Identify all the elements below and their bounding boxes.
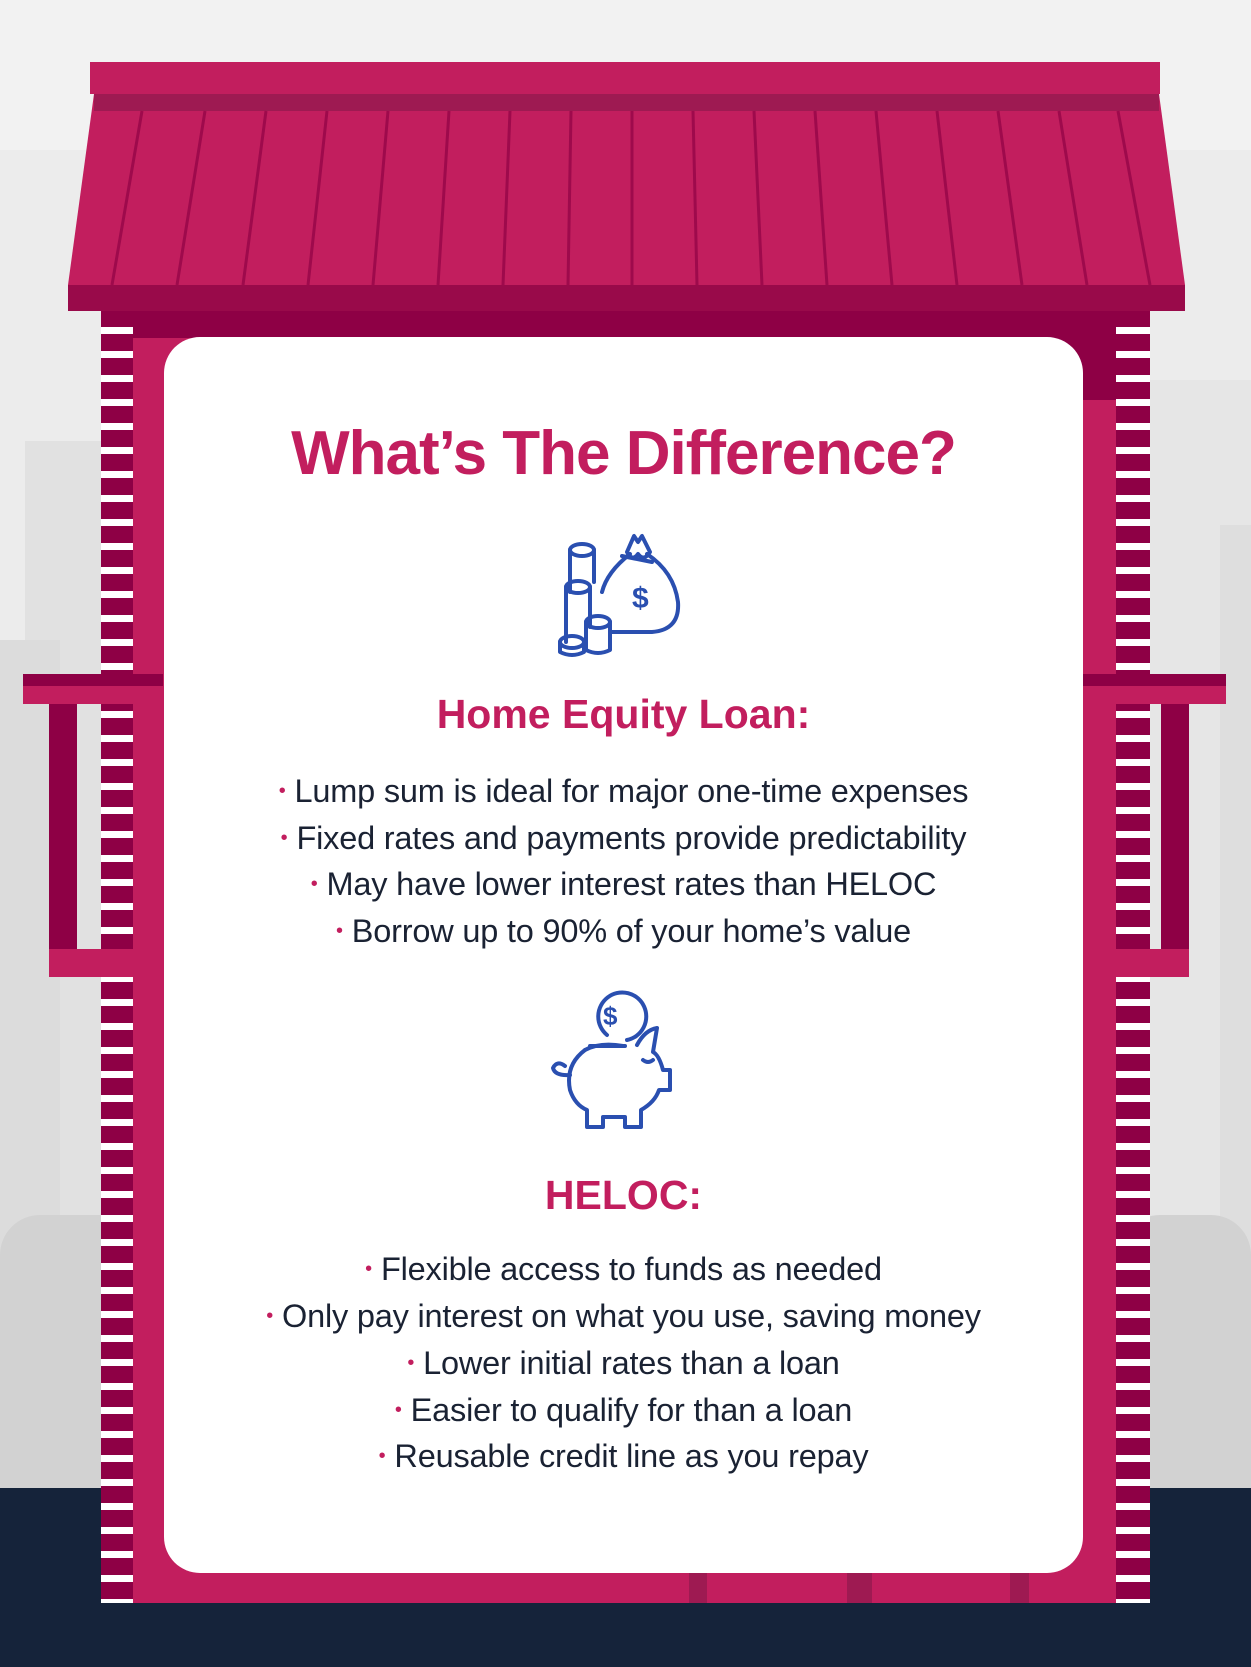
- right balcony: [1083, 674, 1226, 977]
- list: home equity loan: [279, 773, 968, 949]
- icon: piggy bank: [551, 990, 672, 1129]
- list: HELOC: • Lower initial rates than a loan: [407, 1345, 840, 1381]
- left balcony: [23, 674, 163, 977]
- list: home equity loan: • Borrow up to 90% of your home’s value: [336, 913, 911, 949]
- list: home equity loan: • Fixed rates and payments provide predictability: [281, 820, 966, 856]
- icon: money bag: [558, 534, 680, 657]
- white card: [164, 337, 1083, 1573]
- left ladder strip: [101, 310, 133, 1603]
- icon: piggy bank: $: [603, 1001, 618, 1031]
- heading: home equity loan: Home Equity Loan:: [437, 691, 810, 737]
- title: What’s The Difference?: [291, 419, 956, 488]
- list: HELOC: • Flexible access to funds as needed: [365, 1251, 882, 1287]
- icon: money bag: $: [632, 582, 649, 615]
- list: home equity loan: • May have lower interest rates than HELOC: [311, 866, 936, 902]
- ground: [0, 1488, 1251, 1667]
- beam: [133, 310, 1116, 338]
- list: HELOC: • Easier to qualify for than a loan: [395, 1392, 852, 1428]
- wall body: [133, 310, 1116, 1603]
- list: HELOC: • Only pay interest on what you use, saving money: [266, 1298, 981, 1334]
- right ladder strip: [1116, 310, 1150, 1603]
- list: HELOC: [266, 1251, 981, 1474]
- list: HELOC: • Reusable credit line as you repay: [379, 1438, 868, 1474]
- heading: HELOC: HELOC:: [545, 1172, 702, 1218]
- base segments: [689, 1573, 707, 1603]
- list: home equity loan: • Lump sum is ideal for major one-time expenses: [279, 773, 968, 809]
- roof: [68, 62, 1185, 311]
